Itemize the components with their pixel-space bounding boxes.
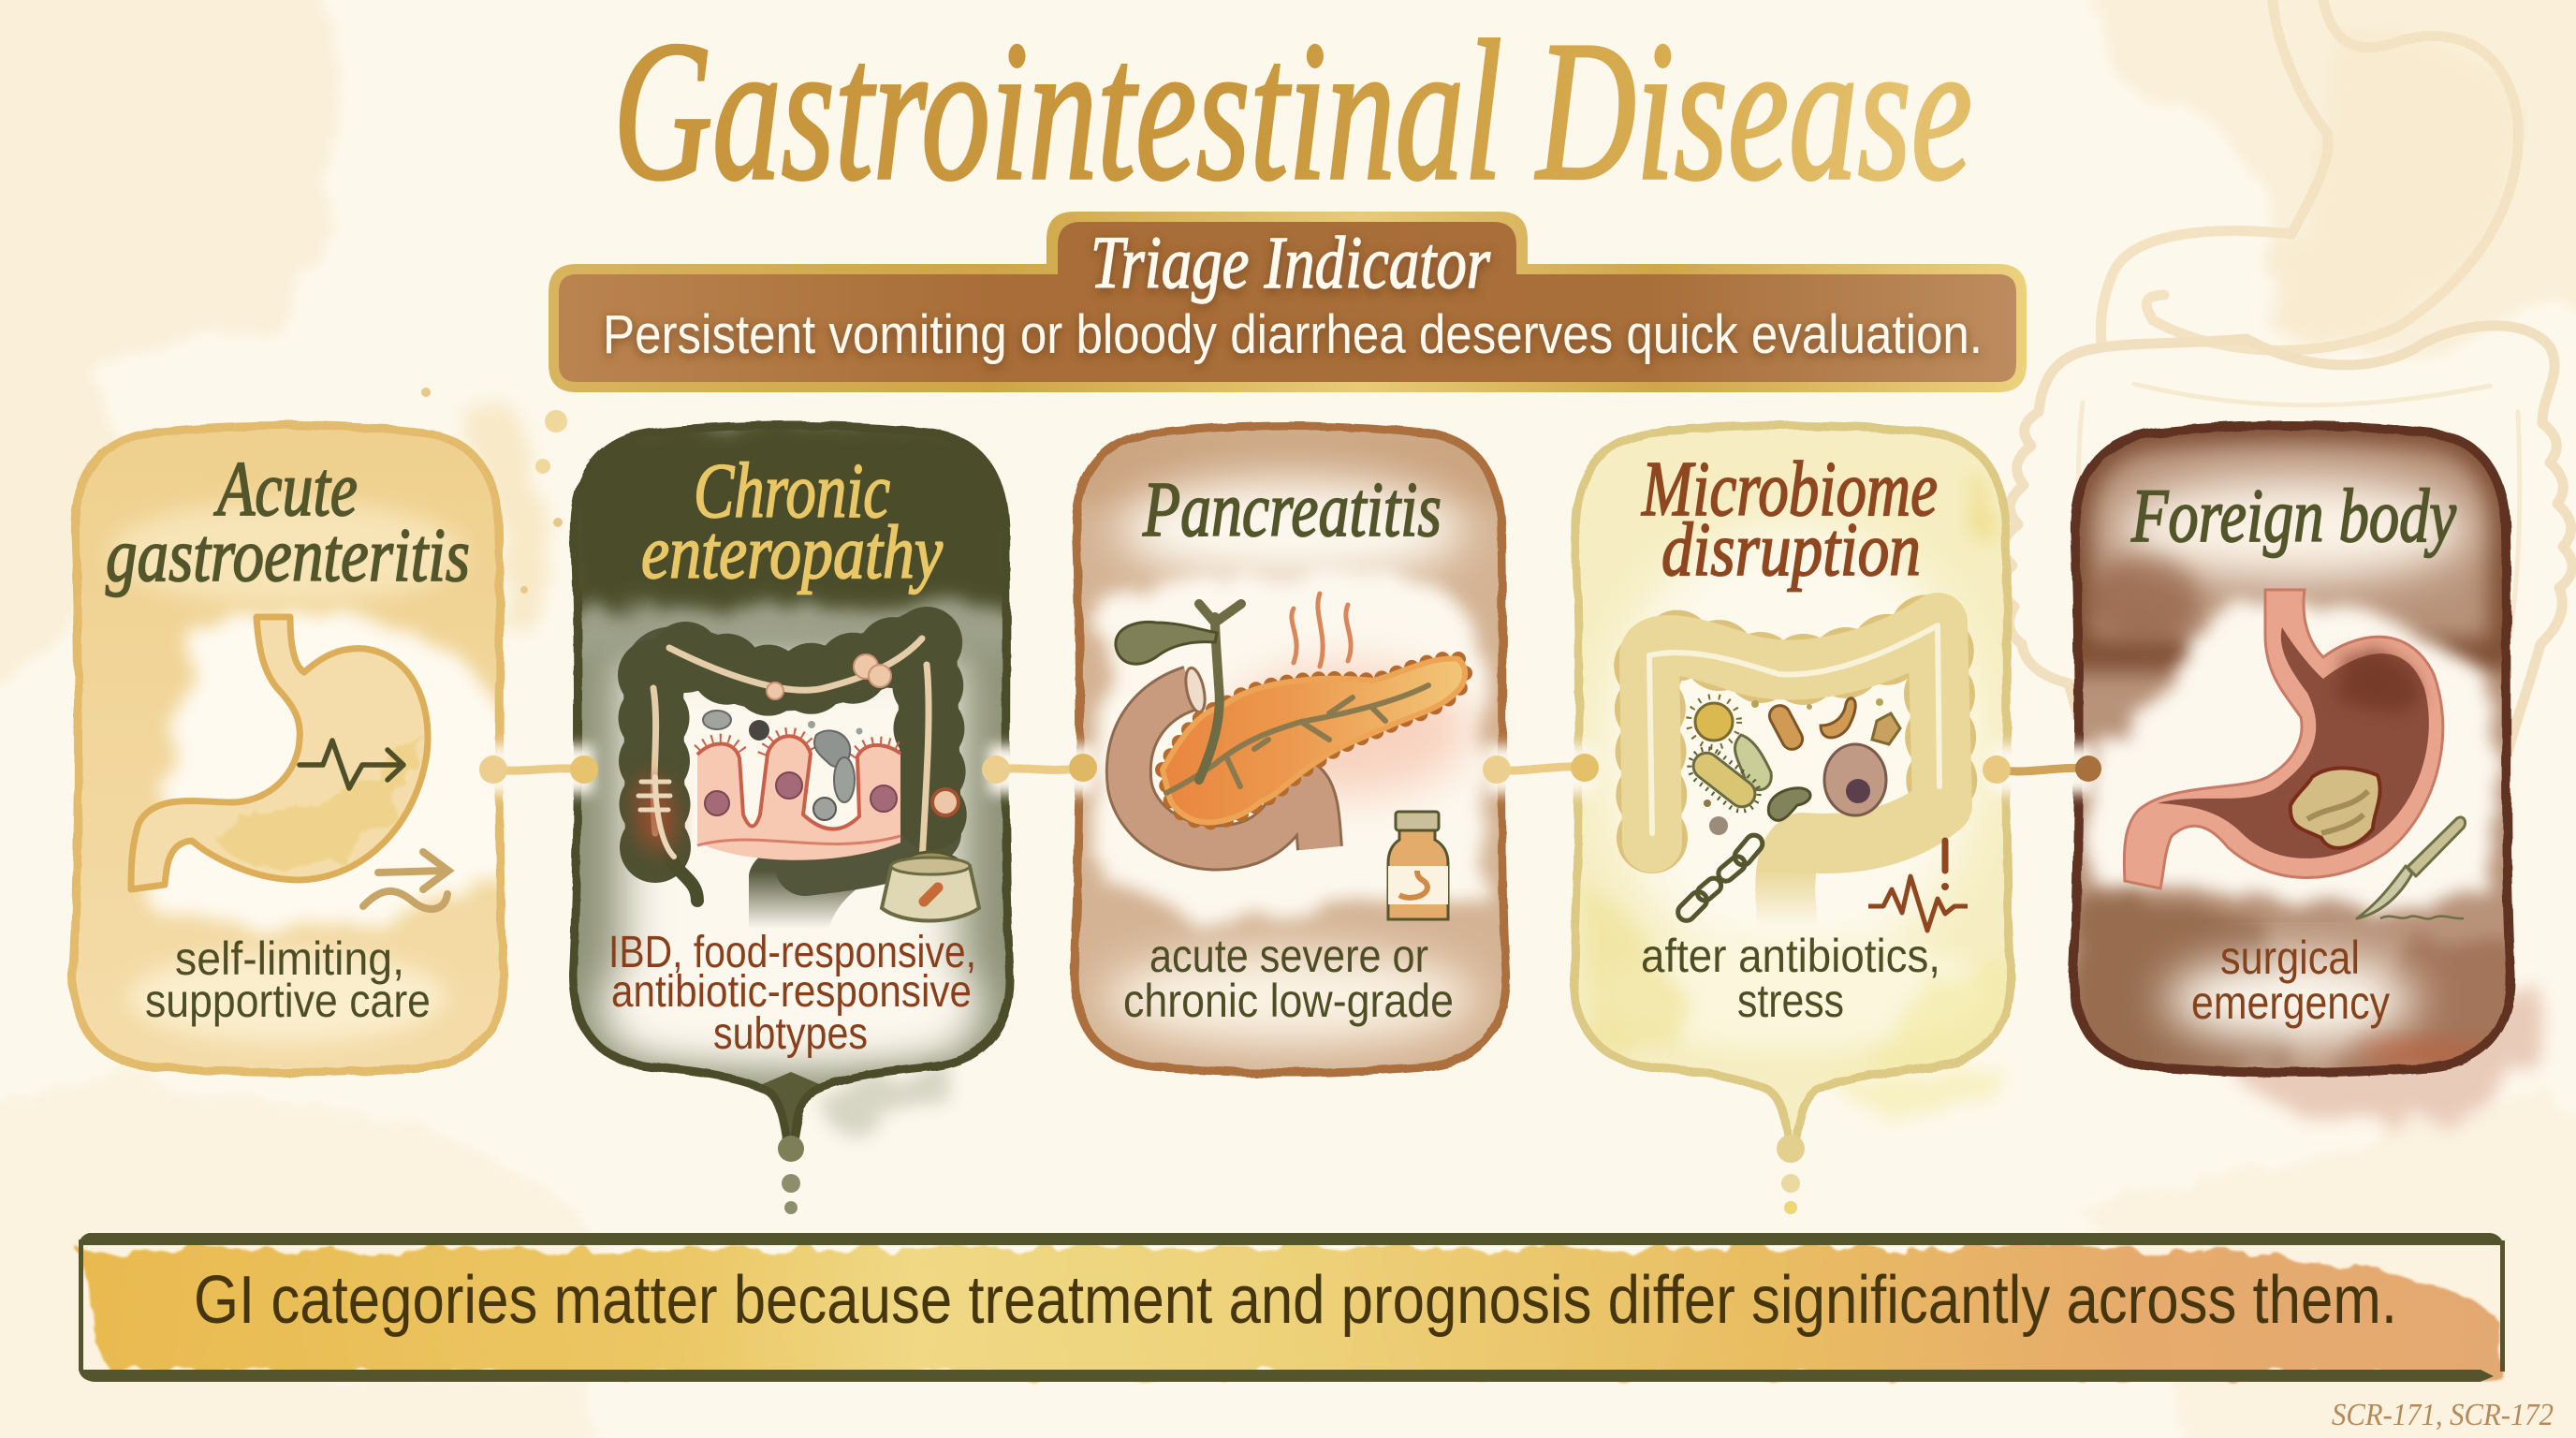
icon: intestinal villi [697, 711, 902, 860]
card wash [66, 421, 524, 1077]
description [608, 928, 976, 1059]
splash under spike [821, 1067, 955, 1134]
heading [106, 445, 470, 597]
banner message: Persistent vomiting or bloody diarrhea deserves quick evaluation. [603, 304, 1983, 365]
heading: Pancreatitis [1142, 465, 1442, 552]
card border [1573, 425, 2011, 1147]
icon: inflamed pancreas [1116, 594, 1470, 848]
heading: disruption [1661, 507, 1921, 592]
card border [2073, 425, 2510, 1073]
banner heading: Triage Indicator [1090, 221, 1491, 303]
icon: food bowl with pill [882, 852, 979, 921]
blood splash behind foreign body card [2228, 989, 2552, 1124]
icon: stomach [131, 617, 428, 889]
heading: gastroenteritis [106, 513, 470, 597]
yellow splash below card [1835, 1058, 1998, 1116]
bottom takeaway bar [79, 1233, 2505, 1382]
decorative splatter behind first connector [421, 388, 567, 646]
description [2191, 932, 2390, 1029]
icon: medicine bottle [1388, 812, 1448, 919]
connector 3 [1483, 754, 1599, 784]
description: supportive care [145, 975, 431, 1027]
description: emergency [2191, 976, 2390, 1029]
heading: Microbiome [1641, 445, 1938, 532]
heading: Chronic [694, 447, 890, 534]
drip dots [1777, 1135, 1805, 1214]
card border [1075, 425, 1506, 1073]
description: after antibiotics, [1641, 930, 1940, 982]
description: surgical [2220, 932, 2360, 984]
banner gold frame [549, 212, 2027, 392]
connector 2 [982, 754, 1097, 784]
icon: golden colon [1649, 623, 1942, 927]
description: stress [1737, 975, 1844, 1027]
description: acute severe or [1149, 930, 1428, 982]
connector 1 [479, 756, 598, 784]
source reference: SCR-171, SCR-172 [2332, 1398, 2554, 1432]
border gaps at connectors [485, 745, 2095, 794]
icon: scalpel [2357, 817, 2466, 918]
panel: pancreatitis [1067, 421, 1516, 1077]
description [145, 932, 431, 1027]
description: IBD, food-responsive, [608, 928, 976, 977]
description: chronic low-grade [1123, 975, 1454, 1027]
heading: Acute [213, 445, 358, 532]
icon: motion arrows [363, 852, 448, 909]
triage banner [549, 212, 2027, 392]
bar wash [80, 1247, 2499, 1376]
card wash [1578, 429, 2007, 1135]
connector 4 [1983, 756, 2101, 784]
panel: acute gastroenteritis [66, 421, 524, 1077]
card border [73, 425, 504, 1073]
description: subtypes [713, 1009, 868, 1059]
card wash [2064, 421, 2523, 1077]
card wash [1067, 421, 1516, 1077]
panel: microbiome disruption [1563, 421, 2022, 1214]
panel: chronic enteropathy [562, 421, 1020, 1214]
icon: microbes [1682, 697, 1900, 835]
card wash [577, 429, 1005, 1137]
drip dots [778, 1136, 804, 1214]
icon: stomach with foreign body [2124, 590, 2443, 888]
description [1641, 930, 1940, 1027]
faint anatomy outline: stomach and intestine [2001, 0, 2572, 782]
heading [1641, 445, 1938, 592]
banner brown body [559, 222, 2016, 382]
panel: foreign body [2064, 421, 2523, 1077]
bar frame [79, 1233, 2505, 1382]
heading: enteropathy [641, 510, 944, 594]
description [1123, 930, 1454, 1027]
title: Gastrointestinal Disease [613, 0, 1972, 222]
icon: alert pulse [1868, 841, 1968, 931]
icon: inflamed colon [637, 637, 959, 929]
icon: broken chain [1675, 831, 1765, 924]
heading: Foreign body [2130, 474, 2457, 558]
card border [573, 425, 1010, 1147]
heading [641, 447, 944, 594]
description: antibiotic-responsive [611, 967, 972, 1017]
description: self-limiting, [175, 932, 404, 985]
